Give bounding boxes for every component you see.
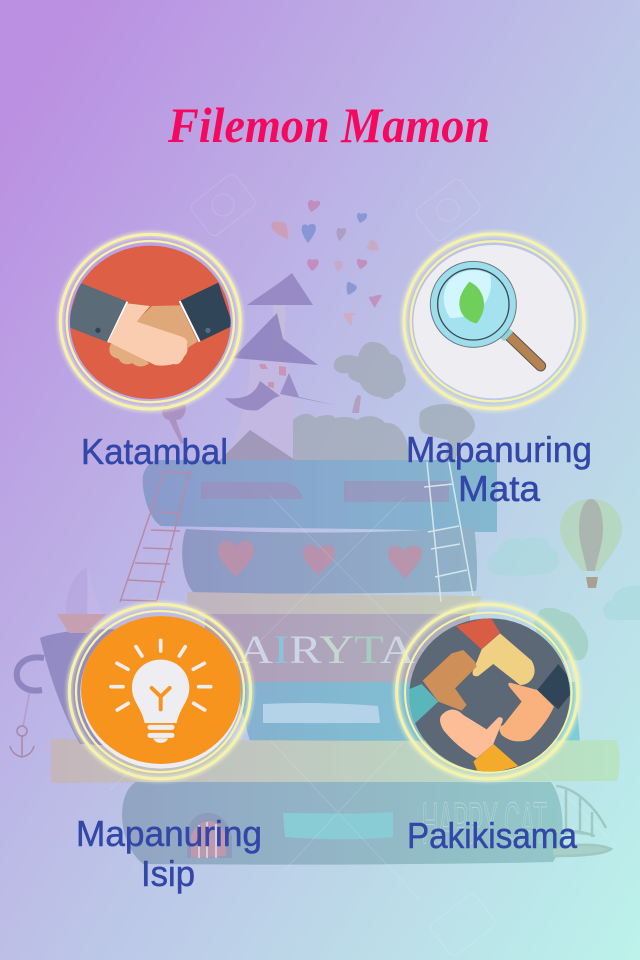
icon: magnifier with leaf <box>404 234 584 409</box>
long green book <box>51 739 620 783</box>
book labels <box>201 481 449 502</box>
cup <box>17 629 140 747</box>
book label lower <box>283 812 393 839</box>
cream book <box>187 592 482 615</box>
right tree <box>534 608 588 668</box>
leaf <box>459 282 484 323</box>
lens glass <box>438 269 509 340</box>
hot-air balloon <box>560 499 622 588</box>
bulb tip <box>153 738 168 743</box>
watermark lines <box>110 172 620 958</box>
blue book label <box>263 703 380 723</box>
icon: handshake <box>60 234 240 409</box>
lens <box>430 261 516 347</box>
heart book <box>182 527 477 594</box>
left ladder <box>120 470 190 602</box>
castle <box>220 273 339 460</box>
top blue book <box>143 460 497 532</box>
right ladder <box>424 462 473 602</box>
label: Mapanuring Isip <box>76 813 262 894</box>
hands and sleeves <box>409 618 570 772</box>
orange disc <box>81 616 241 764</box>
bulb <box>132 660 189 723</box>
ring <box>60 234 240 409</box>
label: Mapanuring Mata <box>406 429 592 509</box>
dark disc <box>409 618 570 772</box>
title: Filemon Mamon <box>167 97 490 153</box>
bottom book <box>122 782 563 865</box>
sailboat <box>57 567 107 633</box>
white disc <box>413 245 574 398</box>
label: Mapanuring Mata: Mapanuring <box>406 429 592 470</box>
filament <box>152 688 170 709</box>
book title: AIRYTA <box>238 627 415 672</box>
icon: light bulb <box>69 604 251 779</box>
trees and bushes <box>162 342 475 460</box>
anchor <box>10 690 34 757</box>
mouse door <box>187 813 232 858</box>
blue book <box>235 682 580 742</box>
ring <box>69 604 251 779</box>
handle <box>508 335 541 366</box>
staircase <box>553 786 611 856</box>
book hearts <box>218 541 422 579</box>
label: Pakikisama: Pakikisama <box>407 815 578 856</box>
lens highlight <box>444 270 491 318</box>
label: Mapanuring Mata: Mata <box>458 468 541 509</box>
icon: four hands <box>397 604 578 779</box>
red disc <box>70 246 231 399</box>
rays <box>111 640 211 710</box>
fairytale book <box>205 614 470 682</box>
ring <box>397 604 578 779</box>
hearts <box>271 200 382 326</box>
label: Katambal: Katambal <box>81 431 228 472</box>
bulb base <box>150 727 172 735</box>
clasped hands <box>66 283 233 366</box>
label: Mapanuring Isip: Isip <box>141 853 195 894</box>
ring <box>404 234 584 409</box>
label: Mapanuring Isip: Mapanuring <box>76 813 262 854</box>
clouds <box>488 537 640 620</box>
white backing <box>80 616 241 769</box>
handle collar <box>498 327 513 341</box>
